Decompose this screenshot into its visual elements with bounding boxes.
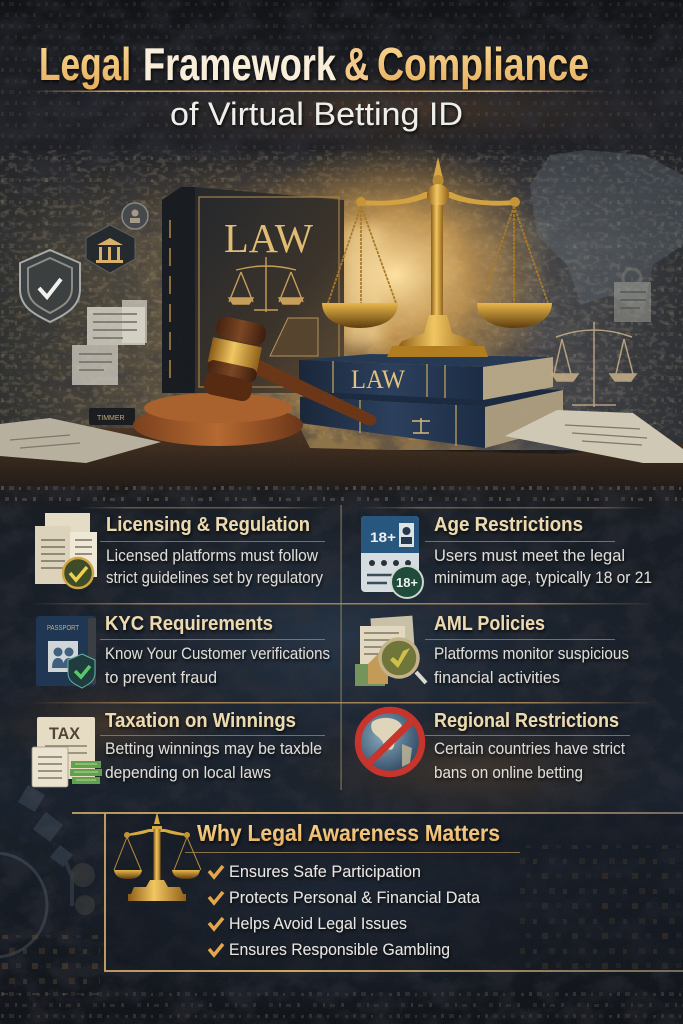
heading: Licensing & Regulation [106,513,310,536]
icon: age id card: 18+ [370,529,396,545]
panel: kyc requirements [36,612,330,688]
panel: aml policies [355,612,629,687]
hero illustration [0,135,683,486]
icon: gold scale [114,812,201,901]
panel: licensing and regulation [35,513,325,588]
description: Users must meet the legal [434,546,625,565]
lower book [300,384,563,407]
icon: tax document and cash: TAX [49,724,81,743]
panel: why legal awareness matters [72,812,683,971]
checklist: Ensures Safe Participation [229,863,421,881]
description: financial activities [434,668,560,687]
grid dividers [30,505,655,790]
heading: Taxation on Winnings [105,709,296,732]
checklist: Ensures Responsible Gambling [229,941,450,959]
description: strict guidelines set by regulatory [106,568,323,587]
icon: age id card: 18+ [396,576,418,590]
panel: age restrictions [361,513,652,598]
icon: institution [86,225,135,273]
heading: AML Policies [434,612,545,635]
golden scale of justice [322,157,552,357]
heading: KYC Requirements [105,612,273,635]
large law book [162,187,344,393]
title [39,38,589,90]
icon: age id card [361,516,423,598]
icon: passport with check: PASSPORT [47,625,80,632]
checklist: Protects Personal & Financial Data [229,889,481,907]
icon: tax document and cash [32,717,102,787]
description: Platforms monitor suspicious [434,644,629,663]
panel: regional restrictions [357,709,630,782]
title: Framework [143,38,336,90]
description: Betting winnings may be taxble [105,739,322,758]
description: to prevent fraud [105,668,217,687]
description: Licensed platforms must follow [106,546,319,565]
background documents [72,300,147,385]
gavel: TIMMER [97,415,125,422]
description: depending on local laws [105,763,271,782]
upper book [299,354,553,367]
stacked blue books [299,354,563,448]
icon: person badge [122,203,148,229]
decorative tech circle bottom left [0,785,100,995]
title: Legal [39,38,131,90]
heading: Age Restrictions [434,513,583,536]
icon: documents with magnifier [355,616,426,686]
faint scale right [552,322,636,407]
description: Certain countries have strict [434,739,625,758]
book title: LAW [224,215,313,261]
book stack label: LAW [351,365,405,394]
panel: taxation on winnings [32,709,325,787]
checklist [209,863,481,959]
icon: documents with check badge [35,513,97,588]
embossed scales [229,257,303,312]
document right [614,269,651,322]
subtitle: of Virtual Betting ID [170,96,463,132]
heading: Regional Restrictions [434,709,619,732]
icon: globe prohibited [357,709,423,775]
table surface [0,410,683,486]
heading: Why Legal Awareness Matters [197,820,500,846]
title: & [344,38,369,90]
world map silhouette [530,150,683,315]
icon: shield with check [20,250,80,322]
description: bans on online betting [434,763,583,782]
gavel [89,315,376,446]
description: minimum age, typically 18 or 21 [434,568,652,587]
title: Compliance [377,38,589,90]
icon: passport with check [36,616,96,688]
description: Know Your Customer verifications [105,644,330,663]
checklist: Helps Avoid Legal Issues [229,915,407,933]
glow behind scales [230,135,560,415]
